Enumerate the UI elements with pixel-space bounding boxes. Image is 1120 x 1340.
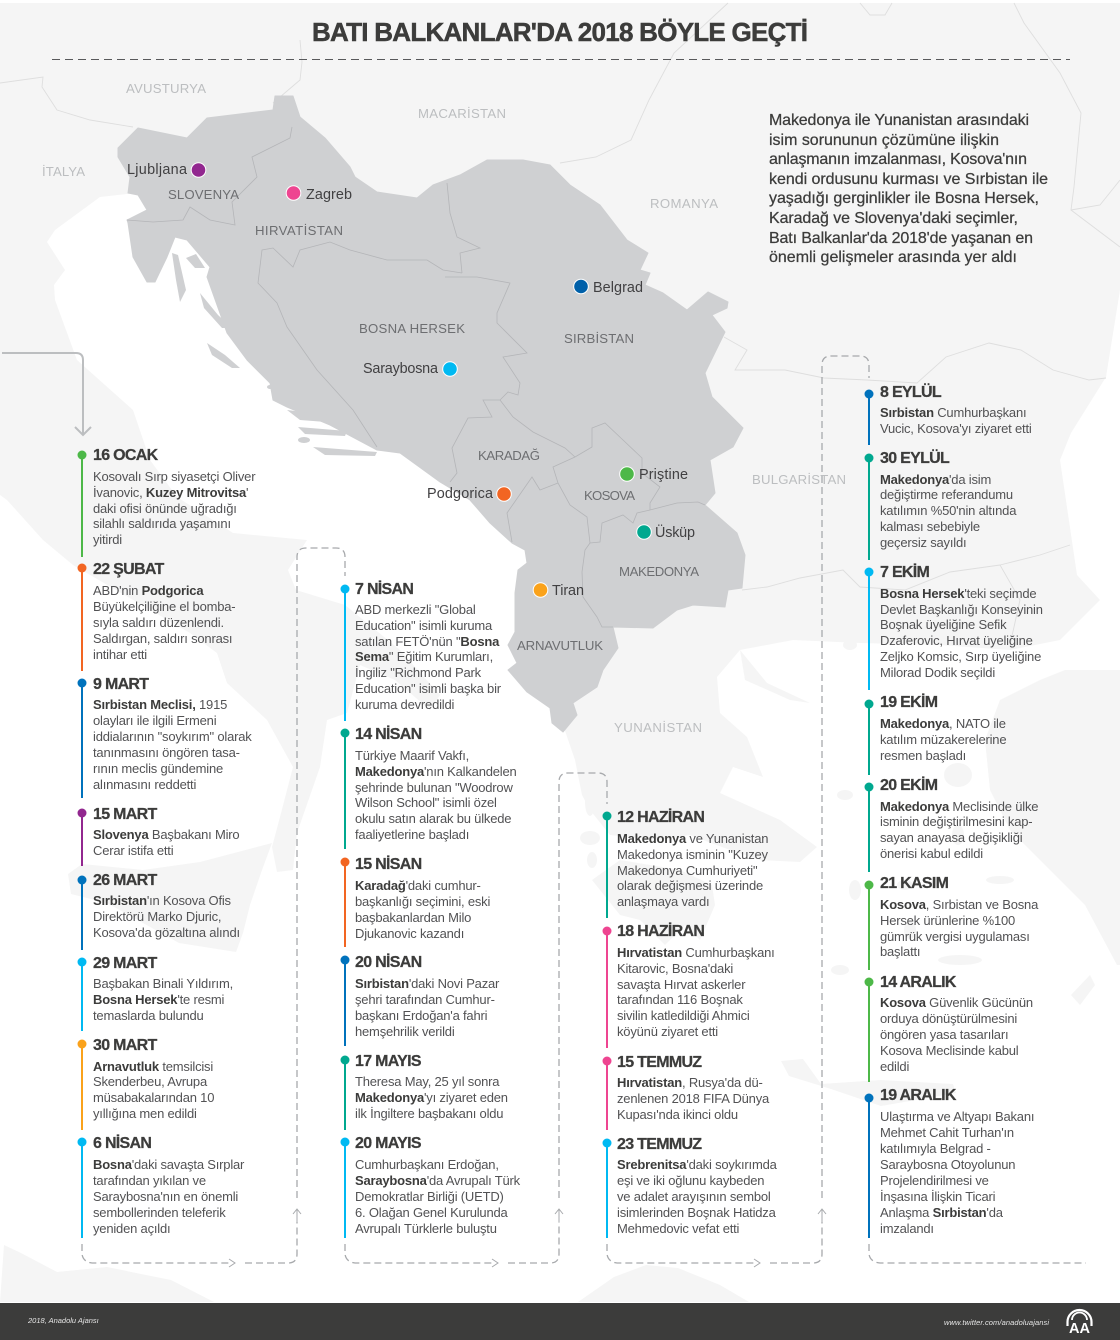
intro paragraph: anlaşmanın imzalanması, Kosova'nın [769, 151, 1027, 168]
event: 26 Mart: Sırbistan'ın Kosova Ofis [93, 893, 232, 908]
event: 12 Haziran: Makedonya isminin "Kuzey [617, 847, 769, 862]
event: 15 Temmuz [602, 1054, 770, 1130]
city: Priştine: Priştine [639, 467, 688, 483]
event: 15 Temmuz: zenlenen 2018 FIFA Dünya [617, 1091, 770, 1106]
event: 30 Mart: Skenderbeu, Avrupa [93, 1074, 208, 1089]
event: 8 Eylül: Vucic, Kosova'yı ziyaret etti [880, 421, 1032, 436]
connector: column 1 to 2 [82, 548, 345, 1267]
event: 7 Ekim: Bosna Hersek'teki seçimde [880, 586, 1036, 601]
event: 15 Temmuz: 15 TEMMUZ [617, 1054, 702, 1071]
city: Saraybosna: Saraybosna [363, 361, 438, 377]
country labels: KOSOVA [584, 488, 635, 503]
city: Podgorica: Podgorica [427, 486, 493, 502]
country labels: ROMANYA [650, 196, 718, 211]
event: 7 Ekim: Dzaferovic, Hırvat üyeliğine [880, 633, 1033, 648]
intro paragraph: kendi ordusunu kurması ve Sırbistan ile [769, 171, 1048, 188]
event: 7 Nisan [340, 580, 502, 721]
event: 6 Nisan [78, 1134, 245, 1238]
event: 8 Eylül: Sırbistan Cumhurbaşkanı [880, 405, 1026, 420]
event: 14 Nisan: şehrinde bulunan "Woodrow [355, 780, 513, 795]
event: 7 Ekim: Zeljko Komsic, Sırp üyeliğine [880, 649, 1041, 664]
event: 15 Nisan: başbakanlardan Milo [355, 910, 471, 925]
event: 6 Nisan: sembollerinden teleferik [93, 1205, 226, 1220]
event: 9 Mart: 9 MART [93, 676, 149, 693]
intro paragraph: Karadağ ve Slovenya'daki seçimler, [769, 210, 1018, 227]
event: 20 Mayıs: Avrupalı Türklerle buluştu [355, 1221, 497, 1236]
event: 15 Nisan: Karadağ'daki cumhur- [355, 878, 481, 893]
event: 15 Nisan: Djukanovic kazandı [355, 926, 464, 941]
event: 29 Mart [78, 955, 233, 1031]
event: 19 Ekim: Makedonya, NATO ile [880, 716, 1006, 731]
event: 20 Mayıs: Saraybosna'da Avrupalı Türk [355, 1173, 521, 1188]
country labels: KARADAĞ [478, 448, 540, 463]
event: 19 Aralık: imzalandı [880, 1221, 934, 1236]
city: Zagreb [286, 186, 352, 203]
event: 20 Mayıs: 20 MAYIS [355, 1135, 422, 1152]
event: 8 Eylül [864, 382, 1032, 445]
event: 15 Mart: 15 MART [93, 806, 157, 823]
event: 23 Temmuz: Srebrenitsa'daki soykırımda [617, 1157, 778, 1172]
event: 19 Aralık: İnşasına İlişkin Ticari [880, 1189, 996, 1204]
event: 12 Haziran: olarak değişmesi üzerinde [617, 878, 763, 893]
event: 22 Şubat [78, 561, 235, 671]
city: Belgrad: Belgrad [593, 280, 643, 296]
event: 15 Temmuz: Hırvatistan, Rusya'da dü- [617, 1075, 763, 1090]
arrow: start of timeline [2, 353, 91, 435]
connector: end of column 4 [869, 1244, 1086, 1263]
event: 23 Temmuz: 23 TEMMUZ [617, 1136, 702, 1153]
event: 7 Ekim: 7 EKİM [880, 563, 930, 581]
timeline column 2 [340, 580, 521, 1238]
event: 7 Nisan: Education" isimli kuruma [355, 618, 493, 633]
event: 26 Mart: 26 MART [93, 872, 157, 889]
event: 26 Mart: Kosova'da gözaltına alındı [93, 925, 240, 940]
event: 19 Ekim: resmen başladı [880, 748, 966, 763]
event: 21 Kasım: 21 KASIM [880, 875, 949, 892]
event: 29 Mart: 29 MART [93, 955, 157, 972]
event: 14 Aralık: Kosova Meclisinde kabul [880, 1043, 1019, 1058]
event: 18 Haziran: Kitarovic, Bosna'daki [617, 961, 733, 976]
country labels: SLOVENYA [168, 187, 239, 202]
event: 16 Ocak: yitirdi [93, 532, 122, 547]
timeline column 4 [864, 382, 1043, 1238]
event: 16 Ocak: daki ofisi önünde uğradığı [93, 501, 237, 516]
event: 18 Haziran: köyünü ziyaret etti [617, 1024, 718, 1039]
footer bar: 2018, Anadolu Ajansı [27, 1316, 99, 1325]
logo: Anadolu Ajansı: AA [1069, 1320, 1090, 1337]
event: 19 Aralık: Anlaşma Sırbistan'da [880, 1205, 1004, 1220]
event: 22 Şubat: sıyla saldırı düzenlendi. [93, 615, 224, 630]
event: 6 Nisan: tarafından yıkılan ve [93, 1173, 206, 1188]
event: 14 Nisan: 14 NİSAN [355, 725, 422, 743]
event: 9 Mart: olayları ile ilgili Ermeni [93, 713, 217, 728]
event: 7 Nisan: satılan FETÖ'nün "Bosna [355, 634, 500, 649]
event: 19 Aralık: Saraybosna Otoyolunun [880, 1157, 1015, 1172]
country labels: BULGARİSTAN [752, 472, 846, 487]
event: 7 Nisan: İngiliz "Richmond Park [355, 665, 482, 680]
event: 16 Ocak: 16 OCAK [93, 447, 159, 464]
event: 14 Nisan: faaliyetlerine başladı [355, 827, 469, 842]
connector: column 3 to 4 [607, 356, 869, 1267]
event: 16 Ocak: İvanovic, Kuzey Mitrovitsa' [93, 485, 248, 500]
event: 15 Mart [78, 806, 239, 866]
event: 30 Eylül: geçersiz sayıldı [880, 535, 966, 550]
event: 30 Mart [78, 1037, 214, 1130]
event: 20 Ekim: 20 EKİM [880, 776, 938, 794]
event: 16 Ocak: silahlı saldırıda yaşamını [93, 516, 231, 531]
event: 14 Aralık: 14 ARALIK [880, 974, 957, 991]
country labels: ARNAVUTLUK [517, 638, 603, 653]
event: 20 Ekim: isminin değiştirilmesini kap- [880, 814, 1032, 829]
event: 7 Nisan: Education" isimli başka bir [355, 681, 502, 696]
event: 14 Aralık: edildi [880, 1059, 909, 1074]
event: 17 Mayıs [340, 1053, 508, 1130]
event: 14 Nisan: Makedonya'nın Kalkandelen [355, 764, 517, 779]
event: 22 Şubat: Büyükelçiliğine el bomba- [93, 599, 235, 614]
intro paragraph: önemli gelişmeler arasında yer aldı [769, 249, 1017, 266]
event: 14 Aralık [864, 974, 1033, 1082]
country labels: BOSNA HERSEK [359, 321, 465, 336]
event: 7 Nisan: 7 NİSAN [355, 580, 413, 598]
event: 15 Temmuz: Kupası'nda ikinci oldu [617, 1107, 738, 1122]
event: 23 Temmuz: ve adalet arayışının sembol [617, 1189, 771, 1204]
event: 26 Mart: Direktörü Marko Djuric, [93, 909, 221, 924]
event: 20 Mayıs: 6. Olağan Genel Kurulunda [355, 1205, 509, 1220]
event: 20 Ekim: önerisi kabul edildi [880, 846, 983, 861]
event: 20 Nisan [340, 953, 500, 1046]
event: 30 Mart: 30 MART [93, 1037, 157, 1054]
event: 30 Mart: yıllığına men edildi [93, 1106, 197, 1121]
event: 14 Aralık: öngören yasa tasarıları [880, 1027, 1008, 1042]
country labels: HIRVATİSTAN [255, 223, 343, 238]
event: 6 Nisan: 6 NİSAN [93, 1134, 151, 1152]
event: 19 Aralık: Mehmet Cahit Turhan'ın [880, 1125, 1014, 1140]
intro paragraph: Makedonya ile Yunanistan arasındaki [769, 112, 1029, 129]
event: 9 Mart: iddialarının "soykırım" olarak [93, 729, 252, 744]
event: 12 Haziran: anlaşmaya vardı [617, 894, 709, 909]
city: Tiran [533, 583, 584, 599]
event: 18 Haziran: Hırvatistan Cumhurbaşkanı [617, 945, 775, 960]
event: 30 Eylül: 30 EYLÜL [880, 448, 950, 467]
event: 19 Ekim: 19 EKİM [880, 693, 938, 711]
event: 19 Aralık: Ulaştırma ve Altyapı Bakanı [880, 1109, 1034, 1124]
country labels: İTALYA [42, 164, 85, 179]
map: Western Balkans [118, 96, 745, 732]
event: 17 Mayıs: Makedonya'yı ziyaret eden [355, 1090, 508, 1105]
event: 20 Nisan: hemşehrilik verildi [355, 1024, 455, 1039]
footer bar: www.twitter.com/anadoluajansi [944, 1318, 1049, 1327]
event: 21 Kasım [864, 875, 1039, 970]
event: 20 Mayıs: Cumhurbaşkanı Erdoğan, [355, 1157, 499, 1172]
event: 7 Ekim [864, 563, 1043, 690]
connector: column 2 to 3 [345, 773, 607, 1267]
event: 16 Ocak: Kosovalı Sırp siyasetçi Oliver [93, 469, 256, 484]
event: 19 Aralık: Projelendirilmesi ve [880, 1173, 989, 1188]
city: Ljubljana: Ljubljana [127, 162, 187, 178]
event: 9 Mart: tanınmasını öngören tasa- [93, 745, 240, 760]
city: Tiran: Tiran [552, 583, 584, 599]
event: 9 Mart [78, 676, 252, 798]
city: Üsküp [637, 523, 695, 541]
event: 23 Temmuz: eşi ve iki oğlunu kaybeden [617, 1173, 764, 1188]
event: 20 Nisan: başkanı Erdoğan'a fahri [355, 1008, 488, 1023]
event: 30 Eylül: Makedonya'da isim [880, 472, 991, 487]
country labels: YUNANİSTAN [614, 720, 702, 735]
event: 19 Aralık: katılımıyla Belgrad - [880, 1141, 991, 1156]
neighbour country borders [0, 3, 1120, 645]
country labels: AVUSTURYA [126, 81, 206, 96]
event: 30 Mart: müsabakalarından 10 [93, 1090, 214, 1105]
Croatian islands [172, 253, 377, 456]
country labels [42, 81, 846, 735]
internal borders [127, 127, 705, 627]
event: 15 Nisan [340, 855, 490, 947]
event: 18 Haziran: sivilin katledildiği Ahmici [617, 1008, 750, 1023]
title: BATI BALKANLAR'DA 2018 BÖYLE GEÇTİ [312, 17, 808, 47]
event: 23 Temmuz: isimlerinden Boşnak Hatidza [617, 1205, 777, 1220]
intro paragraph: isim sorununun çözümüne ilişkin [769, 132, 999, 149]
event: 30 Mart: Arnavutluk temsilcisi [93, 1059, 213, 1074]
event: 20 Ekim [864, 776, 1038, 872]
event: 22 Şubat: Saldırgan, saldırı sonrası [93, 631, 232, 646]
event: 29 Mart: temaslarda bulundu [93, 1008, 204, 1023]
event: 6 Nisan: Bosna'daki savaşta Sırplar [93, 1157, 245, 1172]
event: 19 Aralık: 19 ARALIK [880, 1087, 957, 1104]
intro paragraph [769, 112, 1048, 266]
event: 12 Haziran: Makedonya Cumhuriyeti" [617, 863, 758, 878]
event: 8 Eylül: 8 EYLÜL [880, 382, 942, 401]
event: 7 Ekim: Devlet Başkanlığı Konseyinin [880, 602, 1043, 617]
event: 17 Mayıs: ilk İngiltere başbakanı oldu [355, 1106, 503, 1121]
logo: Anadolu Ajansı [1068, 1310, 1092, 1337]
event: 20 Mayıs: Demokratlar Birliği (UETD) [355, 1189, 504, 1204]
event: 19 Ekim [864, 693, 1006, 775]
timeline column 1 [78, 447, 256, 1238]
capital city markers [127, 162, 695, 599]
event: 29 Mart: Bosna Hersek'te resmi [93, 992, 225, 1007]
event: 14 Aralık: orduya dönüştürülmesini [880, 1011, 1017, 1026]
event: 9 Mart: rının meclis gündemine [93, 761, 223, 776]
event: 21 Kasım: başlattı [880, 944, 920, 959]
event: 7 Nisan: Sema" Eğitim Kurumları, [355, 649, 493, 664]
event: 20 Mayıs [340, 1135, 521, 1238]
event: 21 Kasım: Kosova, Sırbistan ve Bosna [880, 897, 1039, 912]
country labels: SIRBİSTAN [564, 331, 634, 346]
event: 9 Mart: Sırbistan Meclisi, 1915 [93, 697, 227, 712]
event: 22 Şubat: 22 ŞUBAT [93, 561, 164, 578]
event: 6 Nisan: Saraybosna'nın en önemli [93, 1189, 238, 1204]
event: 9 Mart: alınmasını reddetti [93, 777, 196, 792]
event: 29 Mart: Başbakan Binali Yıldırım, [93, 976, 233, 991]
event: 30 Eylül: kalması sebebiyle [880, 519, 980, 534]
event: 7 Nisan: kuruma devredildi [355, 697, 455, 712]
event: 18 Haziran: tarafından 116 Boşnak [617, 992, 743, 1007]
event: 20 Ekim: Makedonya Meclisinde ülke [880, 799, 1038, 814]
event: 26 Mart [78, 872, 240, 950]
event: 12 Haziran [602, 808, 769, 918]
event: 14 Nisan: Türkiye Maarif Vakfı, [355, 748, 469, 763]
event: 12 Haziran: 12 HAZİRAN [617, 808, 704, 826]
event: 21 Kasım: gümrük vergisi uygulaması [880, 929, 1030, 944]
event: 14 Nisan: Wilson School" isimli özel [355, 795, 497, 810]
event: 15 Nisan: 15 NİSAN [355, 855, 422, 873]
event: 30 Eylül: değiştirme referandumu [880, 487, 1013, 502]
event: 22 Şubat: ABD'nin Podgorica [93, 583, 204, 598]
event: 12 Haziran: Makedonya ve Yunanistan [617, 831, 768, 846]
footer bar [0, 1303, 1120, 1340]
event: 17 Mayıs: Theresa May, 25 yıl sonra [355, 1074, 500, 1089]
event: 7 Ekim: Boşnak üyeliğine Sefik [880, 617, 1007, 632]
event: 19 Aralık [864, 1087, 1034, 1238]
event: 30 Eylül [864, 448, 1017, 560]
event: 14 Aralık: Kosova Güvenlik Gücünün [880, 995, 1033, 1010]
event: 23 Temmuz [602, 1136, 778, 1238]
event: 16 Ocak [78, 447, 256, 557]
event: 17 Mayıs: 17 MAYIS [355, 1053, 422, 1070]
event: 22 Şubat: intihar etti [93, 647, 147, 662]
event: 23 Temmuz: Mehmedovic vefat etti [617, 1221, 740, 1236]
event: 20 Nisan: Sırbistan'daki Novi Pazar [355, 976, 500, 991]
event: 20 Nisan: şehri tarafından Cumhur- [355, 992, 495, 1007]
event: 20 Ekim: sayan anayasa değişikliği [880, 830, 1023, 845]
event: 15 Nisan: başkanlığı seçimini, eski [355, 894, 490, 909]
intro paragraph: yaşadığı gerginlikler ile Bosna Hersek, [769, 190, 1039, 207]
intro paragraph: Batı Balkanlar'da 2018'de yaşanan en [769, 230, 1033, 247]
event: 18 Haziran [602, 922, 775, 1048]
event: 19 Ekim: katılım müzakerelerine [880, 732, 1006, 747]
event: 14 Nisan: okulu satın alarak bu ülkede [355, 811, 511, 826]
city: Belgrad [574, 279, 643, 296]
event: 7 Nisan: ABD merkezli "Global [355, 602, 476, 617]
event: 30 Eylül: katılımın %50'nin altında [880, 503, 1017, 518]
event: 14 Nisan [340, 725, 517, 849]
event: 18 Haziran: 18 HAZİRAN [617, 922, 704, 940]
city: Zagreb: Zagreb [306, 187, 352, 203]
event: 6 Nisan: yeniden açıldı [93, 1221, 170, 1236]
event: 18 Haziran: savaşta Hırvat askerler [617, 977, 746, 992]
event: 20 Nisan: 20 NİSAN [355, 953, 422, 971]
country labels: MACARİSTAN [418, 106, 506, 121]
event: 21 Kasım: Hersek ürünlerine %100 [880, 913, 1015, 928]
city: Üsküp: Üsküp [655, 523, 695, 541]
event: 15 Mart: Cerar istifa etti [93, 843, 174, 858]
event: 7 Ekim: Milorad Dodik seçildi [880, 665, 995, 680]
country labels: MAKEDONYA [619, 564, 699, 579]
timeline column 3 [602, 808, 778, 1238]
event: 15 Mart: Slovenya Başbakanı Miro [93, 827, 239, 842]
